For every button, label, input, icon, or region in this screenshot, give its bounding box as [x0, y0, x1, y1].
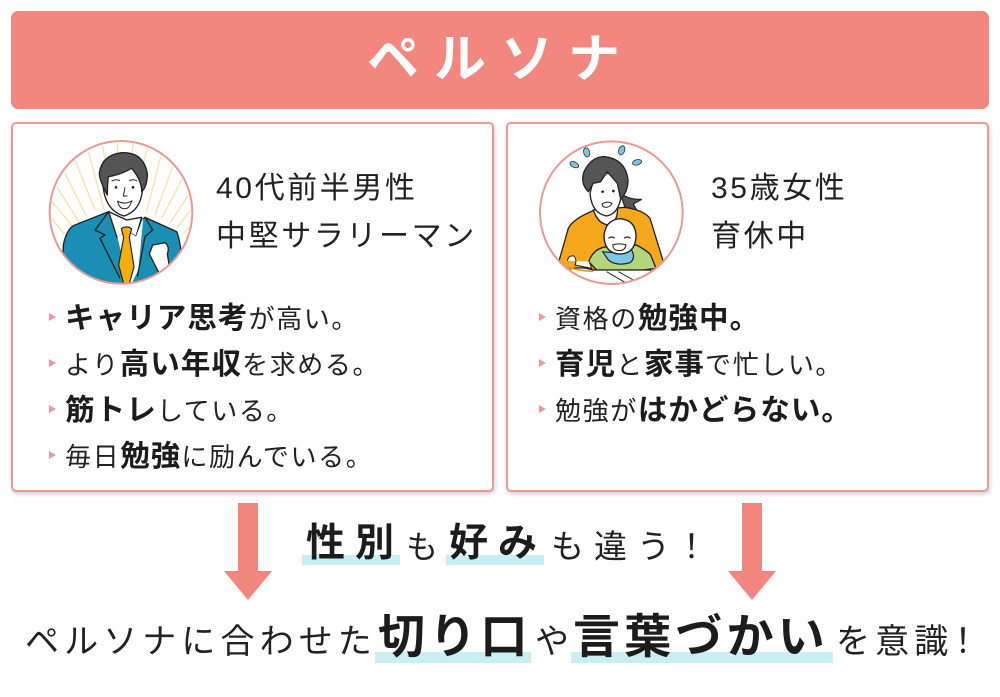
bullet text: 資格の勉強中。 — [555, 302, 760, 335]
text: male persona label: 40代前半男性 — [216, 172, 418, 205]
bullet text: 筋トレしている。 — [65, 394, 294, 427]
text: lead: ペルソナに合わせた — [25, 623, 377, 661]
text: を意識: を意識 — [836, 623, 953, 661]
text: male persona role: 中堅サラリーマン — [216, 220, 477, 253]
text: 言葉づかい: 言葉づかい — [573, 610, 829, 663]
text: female persona label: 35歳女性 — [711, 172, 847, 205]
text: 切り口: 切り口 — [378, 610, 532, 663]
bullet text: 毎日勉強に励んでいる。 — [65, 440, 373, 473]
text: も: も — [406, 529, 438, 565]
panel: female persona — [506, 122, 989, 492]
highlight: 言葉づかい — [571, 652, 833, 663]
text: 性別: 性別 — [306, 522, 404, 565]
arrow: left down — [224, 503, 272, 600]
bullet marker — [539, 313, 546, 321]
arrow: right down — [728, 503, 776, 600]
bullet text: 育児と家事で忙しい。 — [555, 348, 843, 381]
bullet text: より高い年収を求める。 — [65, 348, 380, 381]
bullet text: 勉強がはかどらない。 — [555, 394, 852, 427]
bullet text: キャリア思考が高い。 — [65, 302, 359, 335]
bullet marker — [49, 451, 56, 459]
bullet marker — [49, 359, 56, 367]
panel: male persona — [11, 122, 494, 492]
highlight: 切り口 — [375, 652, 531, 663]
highlight: 好み — [446, 555, 544, 565]
text: difference message — [306, 522, 708, 565]
text: exclamation: ！ — [946, 623, 980, 661]
title banner — [11, 11, 989, 109]
text: exclamation: ！ — [675, 528, 708, 565]
icon: businessman portrait — [48, 140, 194, 285]
bullet marker — [49, 405, 56, 413]
highlight: 性別 — [302, 555, 400, 565]
text: も違う: も違う — [551, 528, 680, 565]
icon: mother with crying baby — [539, 140, 684, 285]
text: や: や — [535, 623, 574, 661]
bullet marker — [49, 313, 56, 321]
bullet marker — [539, 405, 546, 413]
bullet marker — [539, 359, 546, 367]
text: female persona role: 育休中 — [711, 220, 809, 253]
title text: ペルソナ — [367, 31, 635, 89]
text: conclusion message — [25, 610, 980, 663]
text: 好み: 好み — [449, 522, 547, 565]
